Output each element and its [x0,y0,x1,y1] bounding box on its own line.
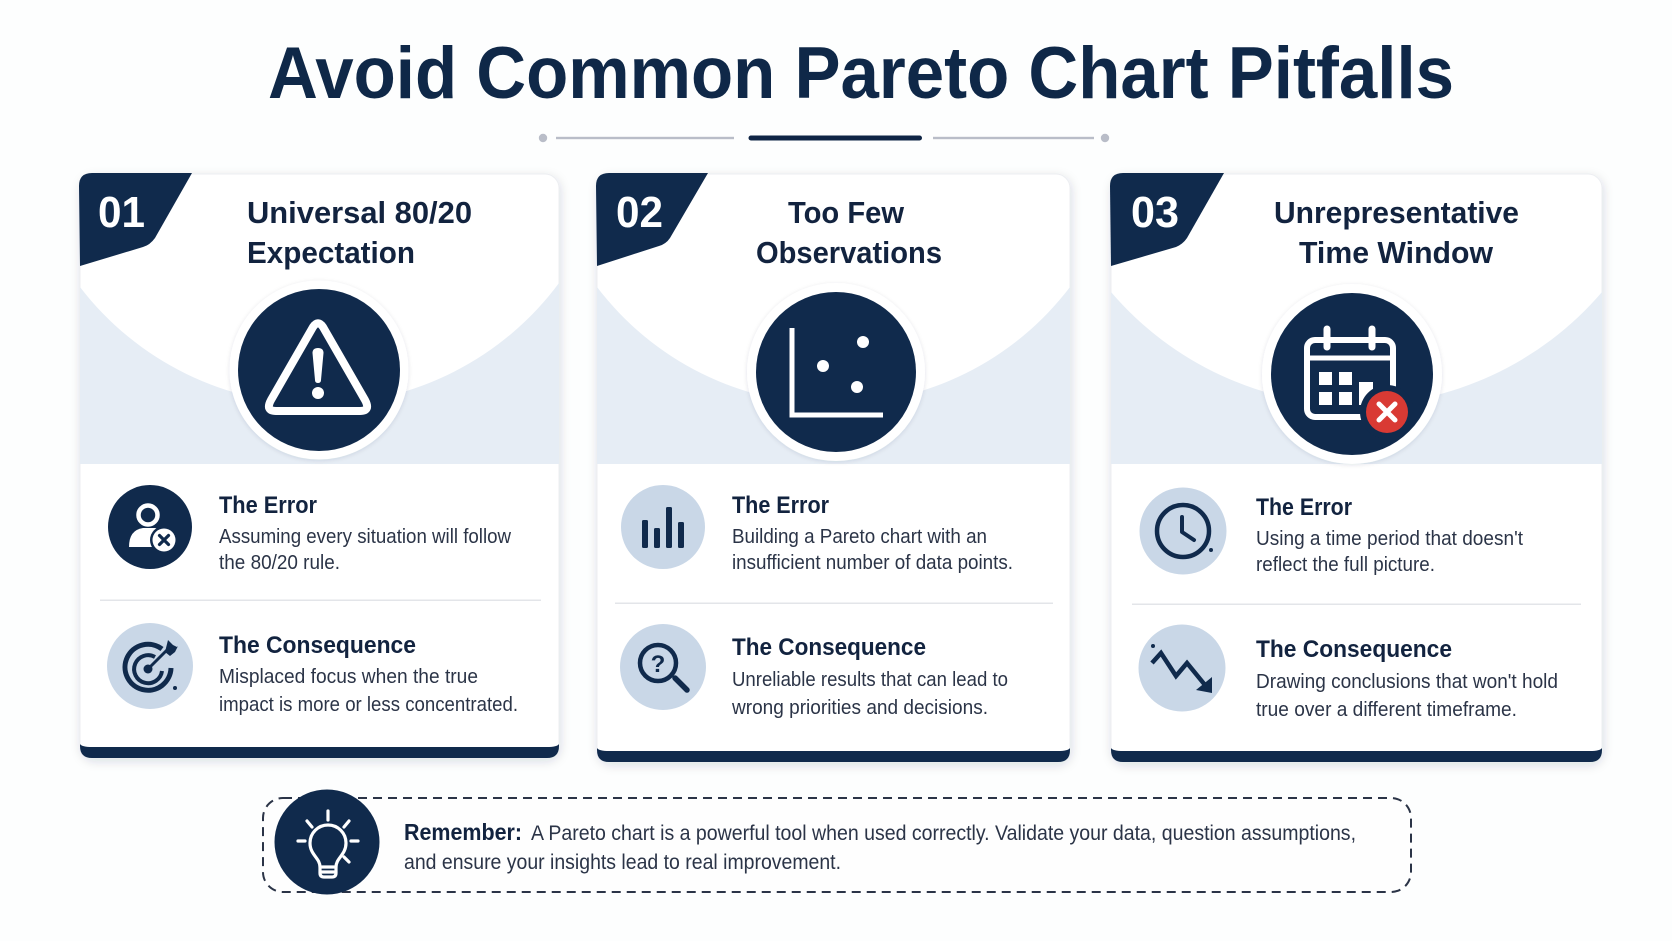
icon: person with x [108,485,192,569]
number badge 03 [1110,173,1224,266]
card heading: Expectation [247,235,415,270]
card heading [247,195,472,270]
number badge 01 [79,173,192,266]
text: the consequence [1256,636,1558,721]
callout text [404,819,1356,874]
callout text: A Pareto chart is a powerful tool when used correctly. Validate your data, question assumptions, [531,822,1356,845]
text: the error: reflect the full picture. [1256,554,1435,576]
panel: card 02 too few observations [596,173,1070,762]
icon: warning triangle [230,280,408,460]
text: the error: The Error [732,492,829,519]
title: Avoid Common Pareto Chart Pitfalls [268,33,1454,114]
text: the error [1256,494,1523,576]
text: the error [219,492,512,574]
text: the consequence: wrong priorities and decisions. [731,697,988,719]
card heading: Time Window [1299,235,1494,270]
panel: card 03 unrepresentative time window [1110,173,1602,762]
text: the consequence: Misplaced focus when the true [219,666,478,688]
callout text: Remember: [404,819,522,845]
text: the consequence: impact is more or less concentrated. [219,694,518,716]
number badge 01: 01 [98,188,145,237]
text: the consequence [731,634,1008,719]
icon: clock [1140,488,1226,574]
text: the error [732,492,1013,574]
text: the consequence: Drawing conclusions that won't hold [1256,671,1558,693]
card heading [756,195,942,270]
text: the consequence: Unreliable results that can lead to [732,669,1008,691]
text: the consequence: The Consequence [732,634,926,661]
icon: calendar with red x [1262,284,1442,464]
card heading: Too Few [788,195,905,230]
text: the error: The Error [219,492,317,519]
text: the error: Building a Pareto chart with an [732,526,987,548]
number badge 03: 03 [1131,188,1179,237]
icon: magnifier with question mark [620,624,706,710]
text: the error: Using a time period that doesn't [1256,528,1523,550]
icon: magnifier with question mark: ? [651,651,665,678]
text: the consequence: The Consequence [219,632,416,659]
card heading: Observations [756,235,942,270]
text: the error: Assuming every situation will follow [219,526,512,548]
text: the consequence [219,632,518,716]
card heading: Universal 80/20 [247,195,472,230]
card heading [1274,195,1519,270]
number badge 02 [596,173,708,266]
number badge 02: 02 [616,188,663,237]
panel: card 01 universal 80/20 expectation [79,173,559,758]
callout text: and ensure your insights lead to real improvement. [404,851,841,874]
text: the error: the 80/20 rule. [219,552,340,574]
text: the consequence: The Consequence [1256,636,1452,663]
title divider [539,134,1109,142]
icon: downward trend arrow [1138,624,1226,712]
text: the consequence: true over a different timeframe. [1256,699,1517,721]
icon: bar chart [621,485,705,569]
icon: target with arrow [107,623,193,709]
text: the error: The Error [1256,494,1352,521]
text: the error: insufficient number of data points. [732,552,1013,574]
card heading: Unrepresentative [1274,195,1519,230]
callout: remember [263,790,1411,894]
icon: light bulb [274,790,380,894]
icon: sparse scatter plot [747,283,925,461]
